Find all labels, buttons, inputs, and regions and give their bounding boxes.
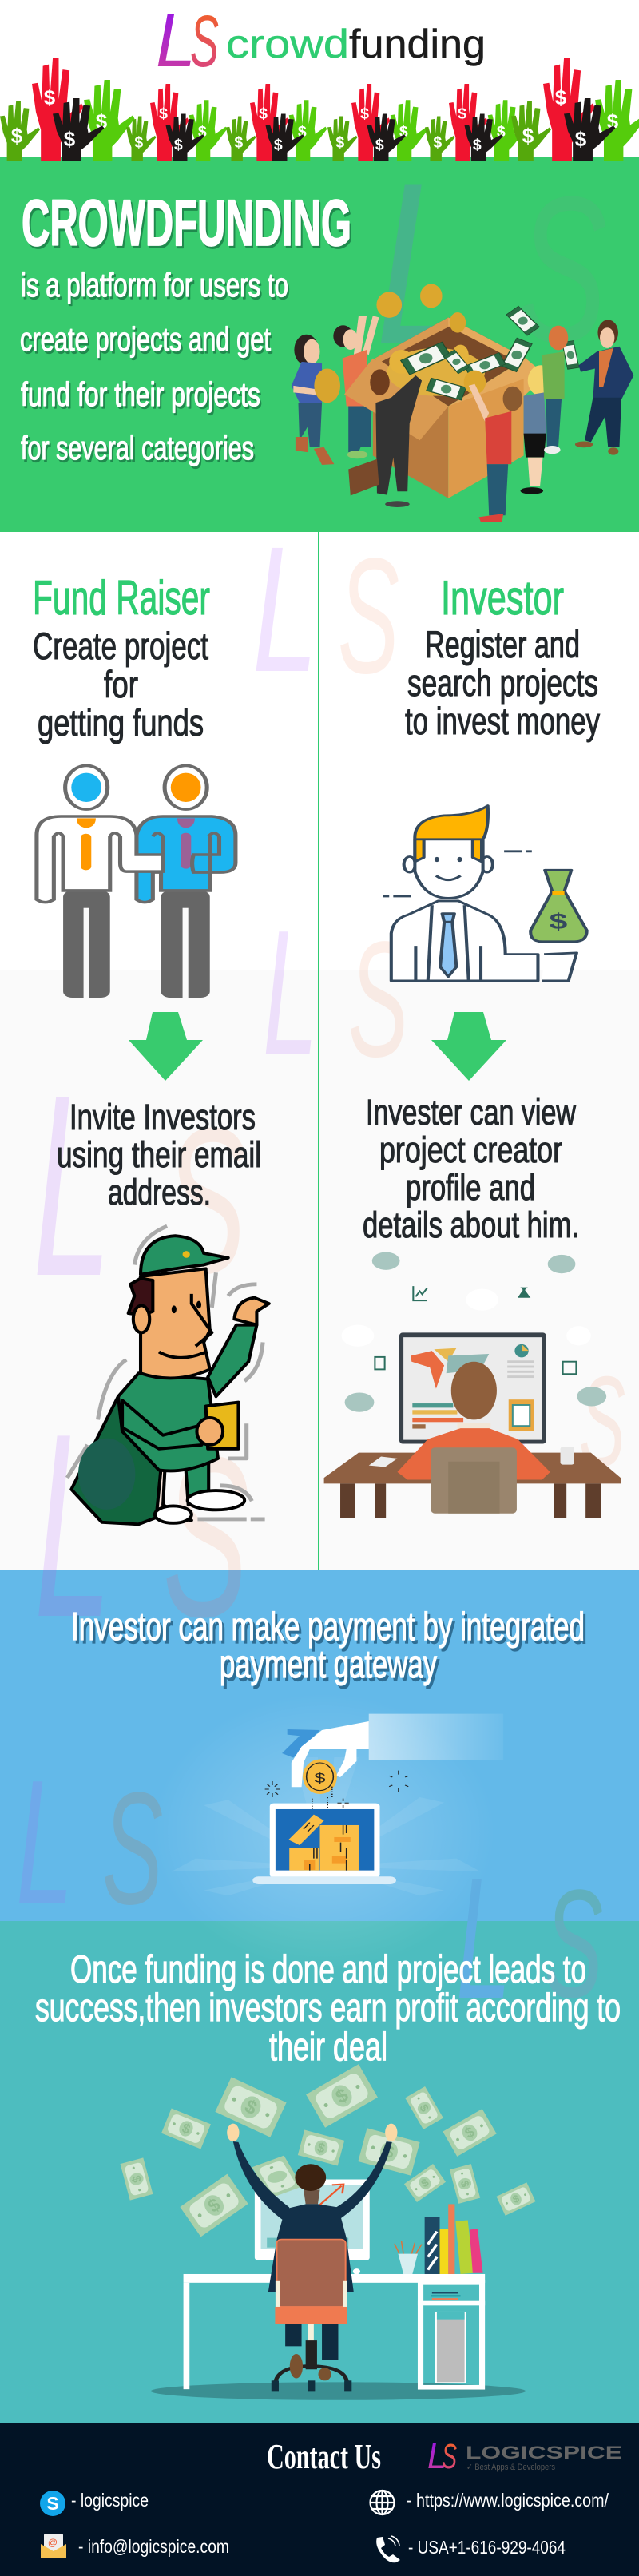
open cardboard box: [344, 312, 546, 498]
text: Create project for getting funds: getting funds: [38, 701, 204, 744]
floating banknotes: $: [180, 2121, 192, 2137]
raised hands row: $: [399, 123, 408, 141]
man in red shirt: [469, 384, 522, 522]
man: [233, 2141, 392, 2222]
man in green shirt: [542, 326, 568, 454]
panel background: grey columns: [0, 970, 639, 1570]
panel: contact: [40, 2435, 622, 2562]
floating banknotes: $: [510, 2192, 522, 2205]
text: Create project for getting funds: Create project: [33, 625, 208, 667]
banknotes: [401, 307, 579, 400]
raised hands row: $: [335, 133, 344, 151]
payment text: payment gateway: [220, 1643, 437, 1686]
raised hands row: $: [11, 124, 23, 148]
logo: LS Logicspice: [427, 2435, 622, 2476]
illustration: crowd around a money box: [292, 284, 633, 522]
header logo: LS crowdfunding: [156, 0, 486, 83]
glow and rays: [153, 1693, 495, 1971]
logo: LS Logicspice: L: [427, 2435, 447, 2476]
man in orange shirt: [333, 316, 379, 458]
raised hands row: $: [159, 105, 168, 122]
watermark LS logos: L: [511, 1346, 559, 1494]
email contact: @: [48, 2537, 58, 2548]
panel background: header: [0, 0, 639, 157]
watermark LS logos: L: [34, 1379, 112, 1672]
seated person from behind: [451, 1362, 497, 1419]
panel background: profit: [0, 1921, 639, 2423]
watermark LS logos: L: [34, 1379, 112, 1672]
panel: payment: [71, 1606, 585, 1971]
woman holding coins: [292, 335, 340, 465]
floating banknotes: $: [462, 2124, 477, 2141]
watermark LS logos: L: [252, 510, 318, 709]
illustration: hand dropping coin into laptop: [153, 1693, 503, 1971]
logo: LS Logicspice: S: [442, 2437, 457, 2476]
raised hands row: $: [64, 127, 76, 151]
text: Invester can view project creator profile and details about him: project creator: [379, 1129, 562, 1170]
illustration: postman: [67, 1226, 269, 1524]
profit text: their deal: [269, 2026, 387, 2069]
cuff: [369, 1714, 503, 1760]
text: Create project for getting funds: for: [104, 663, 138, 705]
heading: Investor: Investor: [441, 571, 564, 625]
email contact: - info@logicspice.com: [78, 2536, 229, 2557]
raised hands row: $: [375, 136, 384, 153]
panel: profit: [35, 1948, 621, 2400]
floating banknotes: $: [316, 2141, 327, 2156]
watermark LS logos: S: [163, 1086, 247, 1317]
skype contact: [40, 2490, 149, 2516]
floating banknotes: $: [458, 2179, 472, 2189]
chair: [276, 2240, 346, 2307]
raised hands row: $: [96, 109, 108, 133]
laptop: [270, 1804, 380, 1877]
floating banknotes: $: [204, 2193, 224, 2217]
raised hands row: $: [607, 109, 619, 133]
raised hands row: $: [174, 136, 183, 153]
watermark LS logos: L: [375, 134, 475, 393]
small icons: [375, 1286, 576, 1374]
panel background: contact: [0, 2423, 639, 2576]
raised hands row: $: [259, 105, 268, 122]
text: Invite Investors using their email address: address.: [108, 1172, 211, 1213]
heading: Contact Us: Contact Us: [267, 2437, 381, 2476]
hero description: is a platform for users to: [21, 266, 288, 304]
watermark LS logos: S: [338, 524, 399, 708]
watermark LS logos: [16, 134, 625, 2036]
watermark LS logos: L: [33, 1041, 112, 1330]
text: Register and search projects to invest money: Register and: [425, 623, 580, 665]
watermark LS logos: S: [163, 1409, 248, 1665]
arrow down: [129, 1012, 203, 1081]
phone contact: - USA+1-616-929-4064: [408, 2537, 566, 2558]
icon: investor with money bag: [383, 806, 587, 981]
coin stacks: [288, 1815, 359, 1871]
illustration: analyst at desk with monitor: [324, 1252, 621, 1518]
raised hands row: $: [198, 123, 207, 141]
hero description: [20, 266, 288, 466]
raised hands row: $: [458, 105, 466, 122]
column: Fund Raiser: [33, 571, 269, 1524]
hero description: fund for their projects: [21, 375, 260, 413]
text: Invite Investors using their email address: [57, 1097, 261, 1213]
profit text: [35, 1948, 621, 2069]
icon: investor with money bag: $: [550, 909, 567, 934]
header logo: LS crowdfunding: funding: [349, 22, 486, 66]
man in navy suit: [575, 320, 633, 455]
hand: [282, 1729, 320, 1758]
gold coins: [376, 284, 486, 395]
watermark LS logos: S: [102, 1760, 163, 1938]
watermark LS logos: L: [263, 894, 318, 1092]
raised hands row: $: [433, 133, 442, 151]
desk: [184, 2274, 485, 2283]
text: Register and search projects to invest money: [405, 623, 600, 742]
watermark LS logos: S: [163, 1409, 248, 1665]
illustration: hand dropping coin into laptop: $: [314, 1771, 326, 1786]
raised hands row: $: [274, 136, 283, 153]
sparkles: [265, 1771, 408, 1808]
phone contact: [376, 2536, 566, 2562]
floating banknotes: $: [419, 2176, 431, 2189]
text: Invite Investors using their email address: Invite Investors: [69, 1097, 256, 1137]
coin: [303, 1760, 337, 1794]
column divider: [318, 532, 320, 1570]
raised hands row: $: [234, 133, 243, 151]
floor shadow: [151, 2382, 526, 2400]
floating banknotes: [121, 2064, 536, 2237]
hero title and description: [20, 187, 351, 466]
monitor: [255, 2180, 370, 2260]
floating banknotes: $: [382, 2141, 396, 2162]
column: Investor: [324, 571, 621, 1518]
website contact: [371, 2490, 609, 2514]
floating banknotes: $: [129, 2174, 143, 2185]
blonde woman: [521, 365, 554, 494]
hero description: for several categories: [21, 429, 254, 466]
hero title: CROWDFUNDING: [22, 187, 351, 260]
text: Invester can view project creator profile and details about him: [363, 1092, 579, 1245]
payment text: [71, 1606, 585, 1686]
floating banknotes: $: [241, 2095, 260, 2120]
email contact: [41, 2534, 229, 2558]
books and pencil cup: [425, 2217, 440, 2274]
header logo: LS crowdfunding: S: [190, 1, 219, 82]
floating banknotes: $: [416, 2102, 431, 2114]
watermark LS logos: S: [348, 907, 409, 1091]
website contact: - https://www.logicspice.com/: [407, 2490, 609, 2511]
raised hands row: $: [298, 123, 307, 141]
raised hands row: $: [134, 133, 143, 151]
raised hands row: $: [360, 105, 369, 122]
text: Invite Investors using their email address: using their email: [57, 1134, 261, 1175]
illustration: celebrating man at desk: [151, 2124, 526, 2400]
panel background: hero: [0, 157, 639, 532]
skype contact: - logicspice: [71, 2490, 149, 2511]
panel background: payment: [0, 1570, 639, 1921]
man in black suit: [348, 369, 422, 507]
raised hands row: $: [497, 123, 506, 141]
desk: [324, 1453, 621, 1483]
raised hands row: $: [575, 127, 587, 151]
arrow down: [431, 1012, 506, 1081]
raised hands row: $: [44, 85, 56, 109]
watermark LS logos: L: [456, 1842, 511, 2036]
raised hands row: $: [473, 136, 482, 153]
clouds: [345, 1252, 606, 1412]
raised hands row: $: [522, 124, 534, 148]
icon: two business people: [37, 765, 236, 999]
text: Invester can view project creator profile and details about him: Invester can view: [366, 1092, 576, 1133]
header logo: LS crowdfunding: crowd: [226, 22, 349, 66]
logo: LS Logicspice: ✓ Best Apps & Developers: [466, 2463, 555, 2472]
logo: LS Logicspice: LOGICSPICE: [466, 2443, 622, 2463]
monitor: [399, 1332, 546, 1443]
header logo: LS crowdfunding: L: [156, 0, 196, 83]
text: Create project for getting funds: [33, 625, 208, 744]
skype contact: S: [46, 2493, 59, 2514]
raised hands row: $: [555, 85, 567, 109]
panel background: white columns: [0, 532, 639, 970]
heading: Fund Raiser: Fund Raiser: [33, 571, 210, 625]
text: Invester can view project creator profile and details about him: profile and: [406, 1167, 535, 1208]
text: Invester can view project creator profile and details about him: details about him.: [363, 1205, 579, 1245]
floating banknotes: $: [332, 2084, 352, 2108]
hero description: create projects and get: [20, 320, 271, 358]
watermark LS logos: L: [16, 1744, 73, 1942]
raised hands row: [0, 58, 639, 161]
